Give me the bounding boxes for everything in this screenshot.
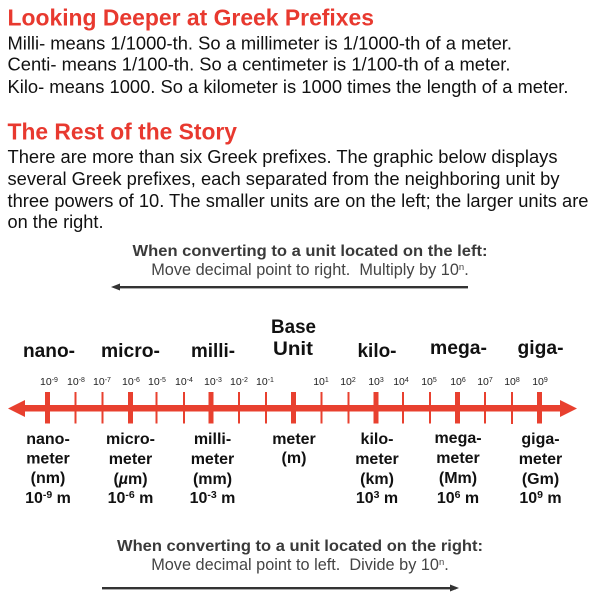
prefix headings: mega- xyxy=(430,338,487,359)
callout: converting to the left: When converting to a unit located on the left: xyxy=(132,243,488,260)
unit: kilometer: (km) xyxy=(360,471,394,488)
unit: kilometer: kilo- xyxy=(361,431,393,448)
unit: nanometer: nano- xyxy=(26,431,70,448)
prefix headings xyxy=(23,317,564,362)
power of ten scale labels: 10 xyxy=(230,376,242,388)
prefix headings: nano- xyxy=(23,341,75,362)
power of ten scale labels: 10 xyxy=(450,376,462,388)
power of ten scale labels: 8 xyxy=(516,377,520,384)
prefix headings: Base xyxy=(271,317,316,338)
unit: megameter: (Mm) xyxy=(439,470,477,487)
heading: The Rest of the Story: The Rest of the Story xyxy=(8,118,237,144)
unit: kilometer: m xyxy=(379,490,398,507)
unit: micrometer: micro- xyxy=(106,431,155,448)
unit: micrometer: meter xyxy=(109,451,152,468)
power of ten scale labels: -7 xyxy=(105,377,111,384)
power of ten scale labels: 10 xyxy=(504,376,516,388)
unit: nanometer xyxy=(25,431,71,507)
power of ten scale labels: 3 xyxy=(380,377,384,384)
callout: converting to the left: n xyxy=(459,262,464,273)
unit: kilometer: meter xyxy=(355,451,399,468)
power of ten scale labels xyxy=(40,376,548,388)
callout: converting to the right xyxy=(117,538,483,574)
unit: megameter xyxy=(434,430,482,507)
unit: nanometer: -9 xyxy=(43,489,52,501)
callout: converting to the left: . xyxy=(464,261,469,279)
power of ten scale labels: -5 xyxy=(160,377,166,384)
text block: rest of the story: There are more than six Greek prefixes. The graphic below displays xyxy=(8,147,558,167)
power of ten scale labels: 10 xyxy=(393,376,405,388)
arrow: pointing left xyxy=(111,284,468,290)
power of ten scale labels: 10 xyxy=(313,376,325,388)
power of ten scale labels: 1 xyxy=(325,377,329,384)
unit: megameter: 6 xyxy=(455,489,461,501)
unit: megameter: mega- xyxy=(434,430,482,447)
power of ten scale labels: -2 xyxy=(242,377,248,384)
power of ten scale labels: 10 xyxy=(532,376,544,388)
callout: converting to the right: When converting to a unit located on the right: xyxy=(117,538,483,555)
power of ten scale labels: 2 xyxy=(352,377,356,384)
unit: megameter: 10 xyxy=(437,490,455,507)
unit: gigameter: meter xyxy=(519,451,562,468)
unit: micrometer: 10 xyxy=(108,490,125,507)
unit: gigameter: giga- xyxy=(521,431,560,448)
unit: millimeter: -3 xyxy=(207,489,217,501)
power of ten scale labels: 10 xyxy=(204,376,216,388)
number line with double arrow and ticks xyxy=(8,392,577,424)
prefix headings: kilo- xyxy=(358,341,396,362)
text block: rest of the story: on the right. xyxy=(8,212,104,232)
power of ten scale labels: -6 xyxy=(134,377,140,384)
text block: prefix definitions: Milli- means 1/1000-th. So a millimeter is 1/1000-th of a meter. xyxy=(8,34,512,54)
power of ten scale labels: -4 xyxy=(187,377,193,384)
unit: gigameter: 10 xyxy=(519,490,537,507)
power of ten scale labels: 10 xyxy=(421,376,433,388)
unit: millimeter: (mm) xyxy=(193,471,232,488)
text block: rest of the story: three powers of 10. The smaller units are on the left; the larger units are xyxy=(8,191,588,211)
power of ten scale labels: 10 xyxy=(40,376,52,388)
unit: nanometer: 10 xyxy=(25,490,43,507)
power of ten scale labels: 5 xyxy=(433,377,437,384)
unit: megameter: meter xyxy=(436,450,480,467)
power of ten scale labels: 4 xyxy=(405,377,409,384)
power of ten scale labels: 9 xyxy=(544,377,548,384)
unit: micrometer: m xyxy=(135,490,153,507)
prefix headings: Unit xyxy=(273,339,314,360)
callout: converting to the right: n xyxy=(439,557,444,568)
power of ten scale labels: 10 xyxy=(477,376,489,388)
power of ten scale labels: 10 xyxy=(67,376,79,388)
power of ten scale labels: -1 xyxy=(268,377,274,384)
text block: prefix definitions: Centi- means 1/100-th. So a centimeter is 1/100-th of a meter. xyxy=(8,54,510,74)
power of ten scale labels: 10 xyxy=(256,376,268,388)
unit: meter: meter xyxy=(272,431,316,448)
unit: millimeter: milli- xyxy=(194,431,231,448)
unit: meter: (m) xyxy=(282,450,306,467)
unit: millimeter: meter xyxy=(191,451,234,468)
unit: kilometer xyxy=(355,431,399,507)
callout: converting to the right: Move decimal point to left. Divide by 10 xyxy=(151,556,439,574)
unit: meter xyxy=(272,431,316,467)
unit: millimeter: m xyxy=(217,490,235,507)
power of ten scale labels: 10 xyxy=(93,376,105,388)
power of ten scale labels: 10 xyxy=(175,376,187,388)
power of ten scale labels: 10 xyxy=(122,376,134,388)
power of ten scale labels: -3 xyxy=(216,377,222,384)
power of ten scale labels: -8 xyxy=(79,377,85,384)
unit: micrometer xyxy=(106,431,155,507)
prefix headings: milli- xyxy=(191,341,235,362)
arrow: pointing right xyxy=(102,584,459,592)
unit: nanometer: m xyxy=(52,490,71,507)
power of ten scale labels: 10 xyxy=(368,376,380,388)
power of ten scale labels: 10 xyxy=(148,376,160,388)
prefix headings: micro- xyxy=(101,341,160,362)
unit: micrometer: (µm) xyxy=(113,471,148,488)
unit: kilometer: 10 xyxy=(356,490,374,507)
text block: rest of the story xyxy=(8,147,588,232)
callout: converting to the right: . xyxy=(444,556,449,574)
unit: millimeter xyxy=(190,431,235,507)
unit: micrometer: -6 xyxy=(125,489,135,501)
unit: nanometer: meter xyxy=(26,450,70,468)
prefix headings: giga- xyxy=(518,338,564,359)
text block: prefix definitions: Kilo- means 1000. So a kilometer is 1000 times the length of a meter. xyxy=(8,77,568,97)
unit: gigameter: 9 xyxy=(537,489,543,501)
text block: prefix definitions xyxy=(8,34,568,97)
heading: Looking Deeper at Greek Prefixes: Looking Deeper at Greek Prefixes xyxy=(8,4,374,30)
unit: gigameter: (Gm) xyxy=(522,471,559,488)
callout: converting to the left xyxy=(132,243,488,279)
power of ten scale labels: 10 xyxy=(340,376,352,388)
unit: gigameter xyxy=(519,431,562,507)
unit: millimeter: 10 xyxy=(190,490,207,507)
callout: converting to the left: Move decimal point to right. Multiply by 10 xyxy=(151,261,459,279)
unit: gigameter: m xyxy=(543,490,562,507)
power of ten scale labels: 7 xyxy=(489,377,493,384)
unit: nanometer: (nm) xyxy=(31,470,65,487)
power of ten scale labels: 6 xyxy=(462,377,466,384)
unit: megameter: m xyxy=(460,490,479,507)
power of ten scale labels: -9 xyxy=(52,377,58,384)
text block: rest of the story: several Greek prefixes, each separated from the neighboring unit by xyxy=(8,169,560,189)
unit: kilometer: 3 xyxy=(374,489,380,501)
